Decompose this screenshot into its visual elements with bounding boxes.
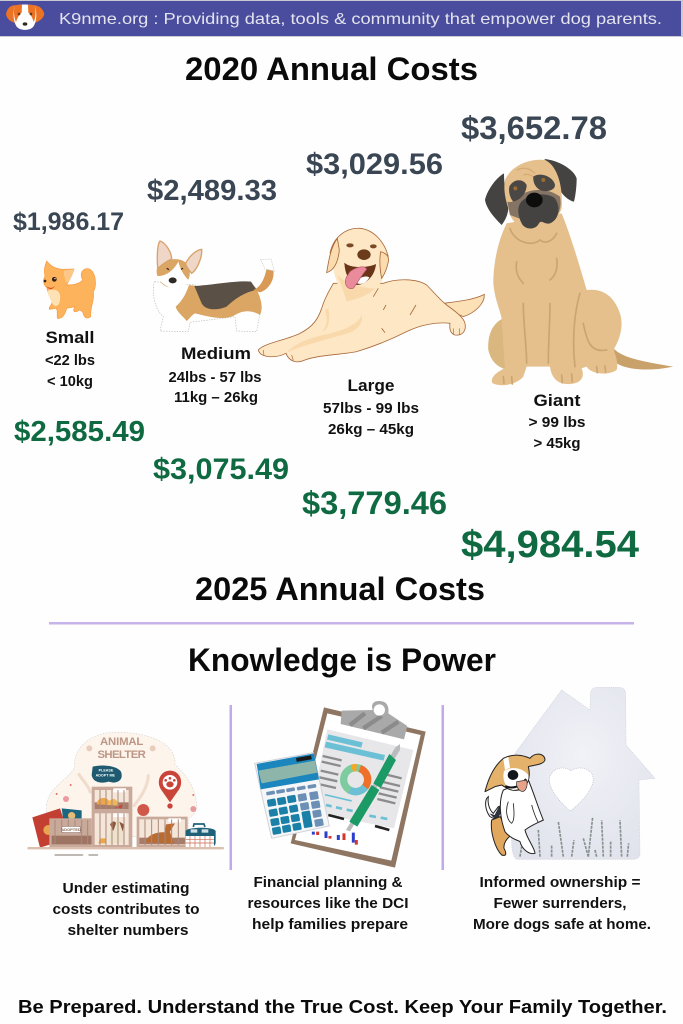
icon: dog face logo (6, 4, 44, 30)
caption: shelter: costs contributes to (52, 902, 200, 918)
label: medium size (168, 344, 262, 406)
caption: financial planning: help families prepare (252, 917, 408, 933)
caption: informed ownership: More dogs safe at home. (473, 917, 651, 933)
illustration: animal shelter (27, 732, 224, 856)
price: large 2025: $3,779.46 (302, 485, 447, 521)
price: giant 2020: $3,652.78 (461, 110, 607, 146)
label: large size: 57lbs - 99 lbs (323, 401, 419, 417)
illustration: animal shelter: PLEASE (99, 768, 114, 772)
caption: shelter: Under estimating (62, 881, 190, 897)
caption: informed ownership: Fewer surrenders, (494, 896, 626, 912)
illustration: clipboard with calculator and pen (255, 701, 426, 868)
header tagline: K9nme.org : Providing data, tools & community that empower dog parents. (59, 11, 662, 28)
illustration: house with heart and beagle (485, 687, 655, 859)
price: large 2020: $3,029.56 (306, 148, 443, 181)
price: giant 2025: $4,984.54 (461, 524, 639, 566)
title: 2025 annual costs: 2025 Annual Costs (195, 571, 485, 607)
caption: informed ownership (473, 875, 651, 933)
label: giant size: Giant (534, 391, 581, 410)
title: 2020 annual costs: 2020 Annual Costs (185, 51, 478, 87)
price: medium 2020: $2,489.33 (147, 175, 277, 207)
label: small size: <22 lbs (45, 353, 95, 369)
price: small 2020: $1,986.17 (13, 208, 124, 236)
illustration: medium corgi (153, 241, 274, 332)
footer message: Be Prepared. Understand the True Cost. Keep Your Family Together. (18, 997, 667, 1017)
header banner (0, 0, 683, 37)
caption: financial planning (248, 875, 408, 933)
label: giant size: > 45kg (534, 436, 580, 452)
label: giant size (528, 391, 586, 452)
illustration: animal shelter: ANIMAL (100, 736, 143, 748)
label: giant size: > 99 lbs (528, 415, 586, 431)
label: medium size: Medium (181, 344, 251, 363)
label: large size: Large (348, 376, 394, 395)
illustration: animal shelter: SHELTER (97, 749, 146, 761)
label: small size: < 10kg (47, 374, 93, 390)
price: medium 2025: $3,075.49 (153, 453, 289, 486)
label: large size (323, 376, 419, 438)
price: small 2025: $2,585.49 (14, 416, 145, 448)
caption: shelter (52, 881, 200, 939)
label: large size: 26kg – 45kg (328, 422, 414, 438)
heading: knowledge is power: Knowledge is Power (188, 642, 496, 678)
label: medium size: 24lbs - 57 lbs (168, 370, 262, 386)
label: medium size: 11kg – 26kg (174, 390, 258, 406)
illustration: large golden retriever (258, 228, 484, 362)
caption: informed ownership: Informed ownership = (480, 875, 640, 891)
label: small size (45, 328, 95, 390)
label: small size: Small (46, 328, 94, 347)
caption: financial planning: resources like the DCI (248, 896, 408, 912)
illustration: animal shelter: ADOPTED (61, 827, 81, 832)
illustration: small dog (44, 261, 96, 318)
caption: financial planning: Financial planning & (254, 875, 403, 891)
caption: shelter: shelter numbers (68, 923, 188, 939)
illustration: giant mastiff (485, 159, 673, 385)
illustration: animal shelter: ADOPT ME (96, 774, 116, 778)
